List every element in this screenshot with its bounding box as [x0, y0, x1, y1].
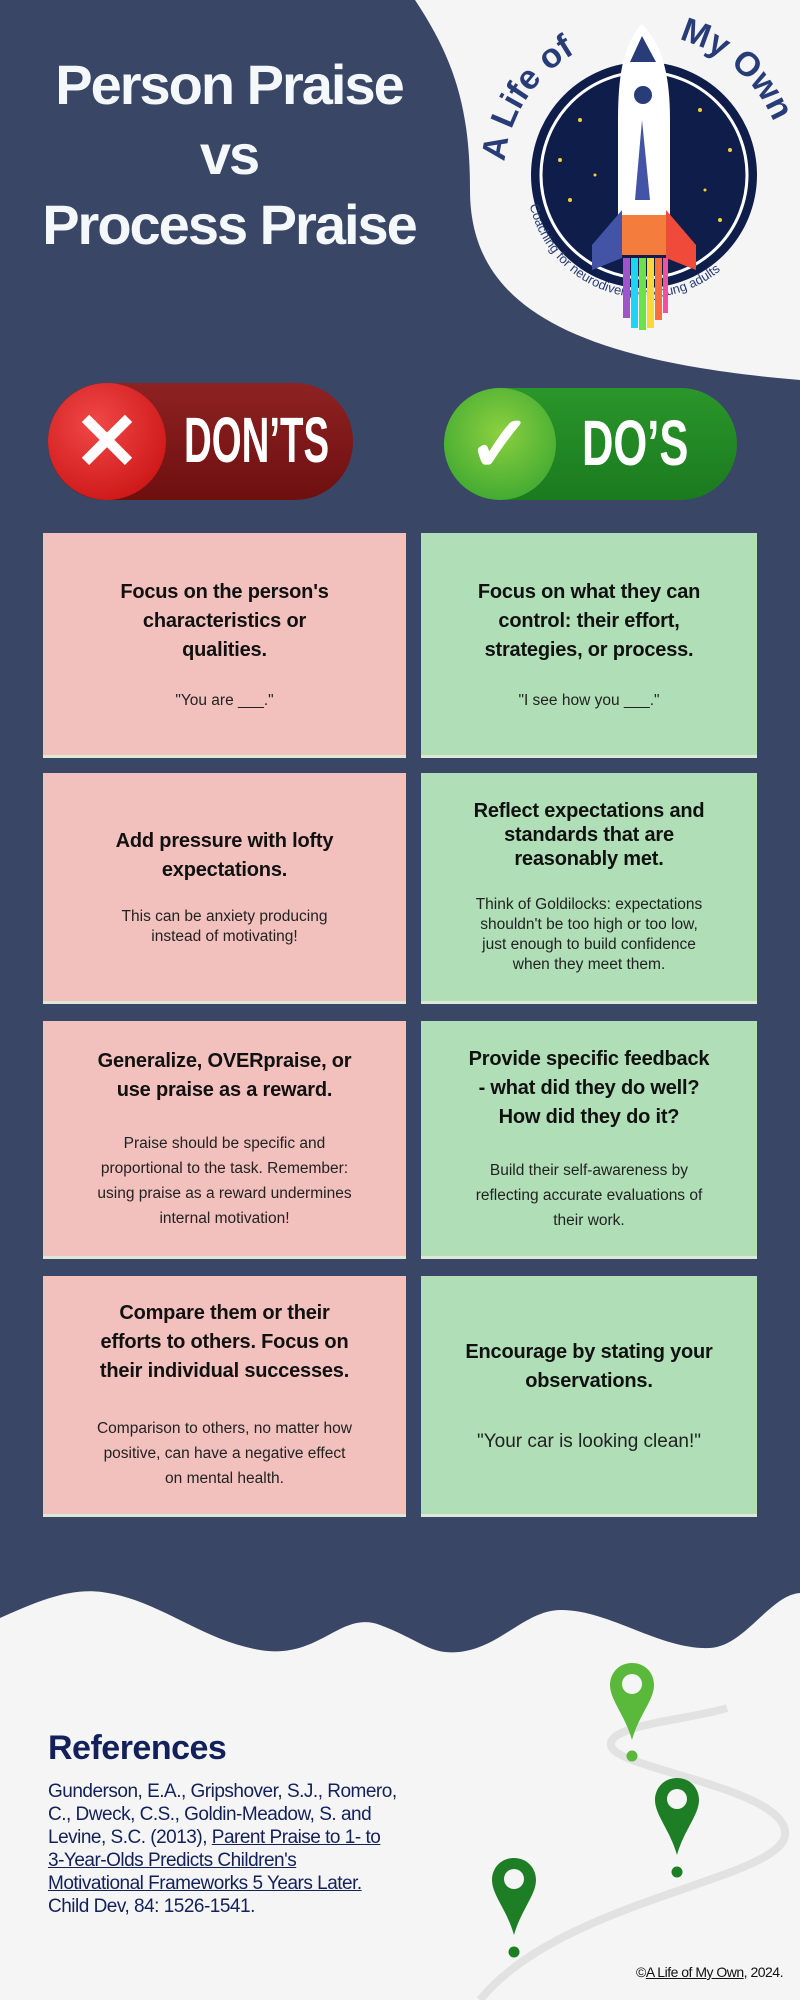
card: don't 2: [43, 773, 406, 1004]
references text: Gunderson, E.A., Gripshover, S.J., Romero,: [48, 1781, 397, 1802]
icon: pin light green: [610, 1663, 654, 1762]
card: do 1: "I see how you ___.": [518, 692, 660, 708]
copyright: ©A Life of My Own, 2024.: [636, 1964, 783, 1980]
logo: My Own: [681, 18, 788, 120]
card: do 3: - what did they do well?: [479, 1076, 699, 1098]
card: do 3: [421, 1021, 757, 1259]
card: don't 2: expectations.: [162, 859, 287, 881]
card: don't 4: Comparison to others, no matter how: [97, 1420, 352, 1437]
references heading: References: [48, 1729, 226, 1767]
card: do 4: "Your car is looking clean!": [477, 1431, 701, 1452]
card: don't 3: using praise as a reward undermines: [97, 1184, 352, 1202]
icon: pin dark green right: [655, 1778, 699, 1878]
title: vs: [200, 123, 258, 186]
icon: red X: [48, 383, 166, 500]
card: don't 2: This can be anxiety producing: [122, 908, 327, 925]
title: Process Praise: [42, 193, 416, 256]
card: do 2: shouldn't be too high or too low,: [480, 916, 698, 933]
title: [42, 53, 416, 256]
card: don't 3: [43, 1021, 406, 1259]
card: do 1: strategies, or process.: [485, 638, 693, 660]
card: do 2: reasonably met.: [514, 848, 664, 870]
references text: [48, 1781, 397, 1917]
card: don't 3: proportional to the task. Remember:: [101, 1160, 348, 1176]
card: don't 1: [43, 533, 406, 758]
card: don't 3: Generalize, OVERpraise, or: [98, 1050, 351, 1072]
icon: green check: ✓: [467, 400, 533, 488]
card: don't 4: their individual successes.: [100, 1360, 349, 1382]
card: don't 1: characteristics or: [143, 610, 306, 632]
card: don't 3: use praise as a reward.: [117, 1078, 332, 1100]
logo: Coaching for neurodivergent young adults: [530, 204, 720, 300]
card: do 2: Think of Goldilocks: expectations: [476, 896, 702, 913]
card: do 3: Build their self-awareness by: [490, 1162, 688, 1178]
logo: [482, 18, 788, 330]
card: don't 4: Compare them or their: [119, 1302, 330, 1324]
DON'TS pill: [48, 383, 353, 500]
references text: 3-Year-Olds Predicts Children's: [48, 1850, 296, 1871]
card: don't 3: internal motivation!: [159, 1210, 290, 1226]
references text: Levine, S.C. (2013), Parent Praise to 1- to: [48, 1827, 380, 1848]
card: do 4: Encourage by stating your: [465, 1341, 713, 1363]
card: don't 3: Praise should be specific and: [124, 1134, 325, 1152]
icon: red X: ✕: [73, 397, 141, 486]
card: do 3: their work.: [553, 1212, 625, 1228]
references text: Motivational Frameworks 5 Years Later.: [48, 1873, 362, 1894]
card: do 2: standards that are: [504, 824, 674, 846]
card: do 2: when they meet them.: [513, 956, 665, 973]
card: don't 2: Add pressure with lofty: [116, 830, 333, 852]
card: don't 4: on mental health.: [165, 1470, 284, 1487]
DO'S pill: [444, 388, 737, 500]
card: don't 1: Focus on the person's: [120, 580, 329, 602]
title: Person Praise: [55, 53, 403, 116]
DON'TS pill: DON’TS: [184, 404, 329, 476]
card: do 3: Provide specific feedback: [469, 1048, 709, 1070]
DO'S pill: DO’S: [582, 407, 688, 479]
card: do 2: Reflect expectations and: [474, 800, 704, 822]
card: don't 4: positive, can have a negative effect: [104, 1445, 345, 1462]
icon: green check: [444, 388, 556, 500]
card: do 3: reflecting accurate evaluations of: [476, 1186, 702, 1204]
icon: pin dark green left: [492, 1858, 536, 1958]
card: don't 4: efforts to others. Focus on: [101, 1331, 348, 1353]
card: do 2: just enough to build confidence: [482, 936, 696, 953]
card: don't 1: qualities.: [182, 638, 267, 660]
card: do 1: Focus on what they can: [478, 580, 700, 602]
card: don't 2: instead of motivating!: [151, 928, 298, 945]
references text: Child Dev, 84: 1526-1541.: [48, 1896, 255, 1917]
card: do 2: [421, 773, 757, 1004]
card: do 1: [421, 533, 757, 758]
card: don't 4: [43, 1276, 406, 1517]
card: do 1: control: their effort,: [498, 610, 680, 632]
card: do 4: [421, 1276, 757, 1517]
road with pins: [477, 1663, 789, 2000]
references text: C., Dweck, C.S., Goldin-Meadow, S. and: [48, 1804, 371, 1825]
card: do 3: How did they do it?: [499, 1106, 679, 1128]
card: do 4: observations.: [525, 1370, 653, 1392]
card: don't 1: "You are ___.": [175, 692, 274, 708]
